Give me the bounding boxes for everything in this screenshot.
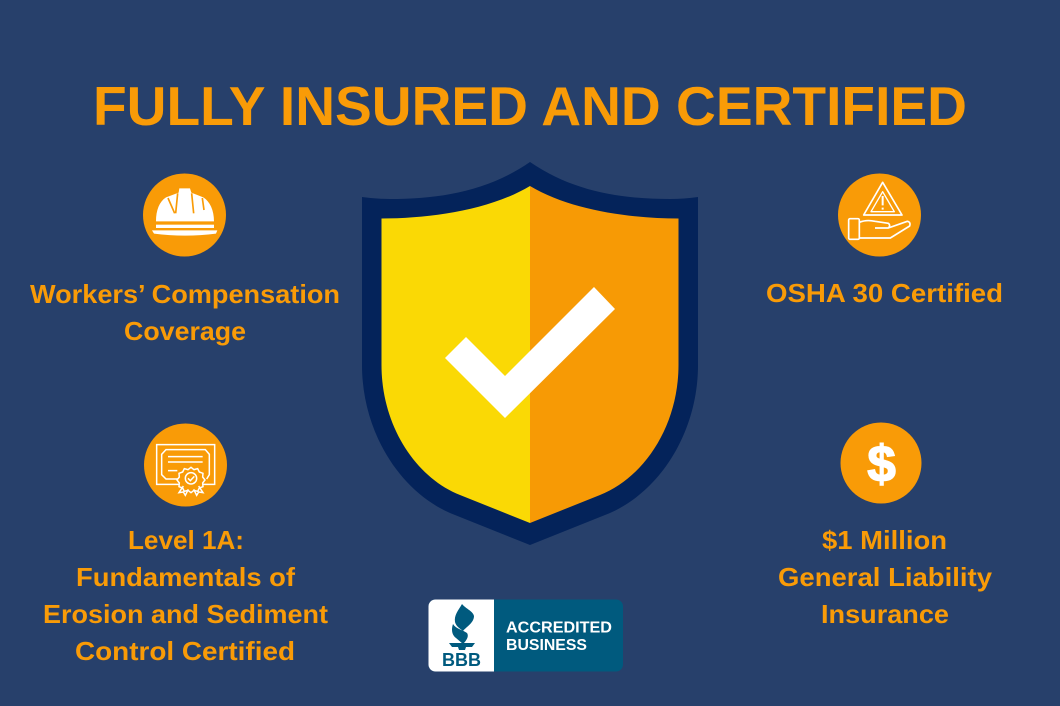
icon: dollar sign [840, 422, 922, 504]
label: OSHA 30 Certified [766, 278, 1003, 308]
icon: hand holding warning sign [838, 174, 921, 256]
shield with check mark [362, 162, 698, 545]
item: erosion certification: Control Certified [75, 636, 295, 666]
icon: dollar sign: $ [867, 435, 896, 492]
label: Level 1A: [128, 525, 244, 555]
item: erosion certification [43, 424, 328, 666]
icon: BBB torch [442, 604, 481, 670]
item: general liability: Insurance [821, 599, 949, 629]
icon: certificate [144, 424, 227, 506]
item: erosion certification: Fundamentals of [76, 562, 295, 592]
item: OSHA 30 [766, 174, 1003, 308]
item: workers' compensation [30, 174, 340, 346]
badge text: ACCREDITED [506, 620, 612, 636]
BBB accredited business badge: BUSINESS [506, 637, 587, 654]
BBB accredited business badge [428, 600, 623, 672]
item: general liability [778, 422, 993, 629]
label: Workers’ Compensation [30, 279, 340, 309]
item: erosion certification: Erosion and Sediment [43, 599, 328, 629]
item: workers' compensation: Coverage [124, 316, 246, 346]
title: FULLY INSURED AND CERTIFIED [93, 75, 967, 137]
item: general liability: General Liability [778, 562, 993, 592]
icon: BBB torch: BBB [442, 650, 481, 670]
icon: check mark [445, 287, 615, 418]
icon: hard hat [143, 174, 226, 256]
label: $1 Million [822, 525, 947, 555]
